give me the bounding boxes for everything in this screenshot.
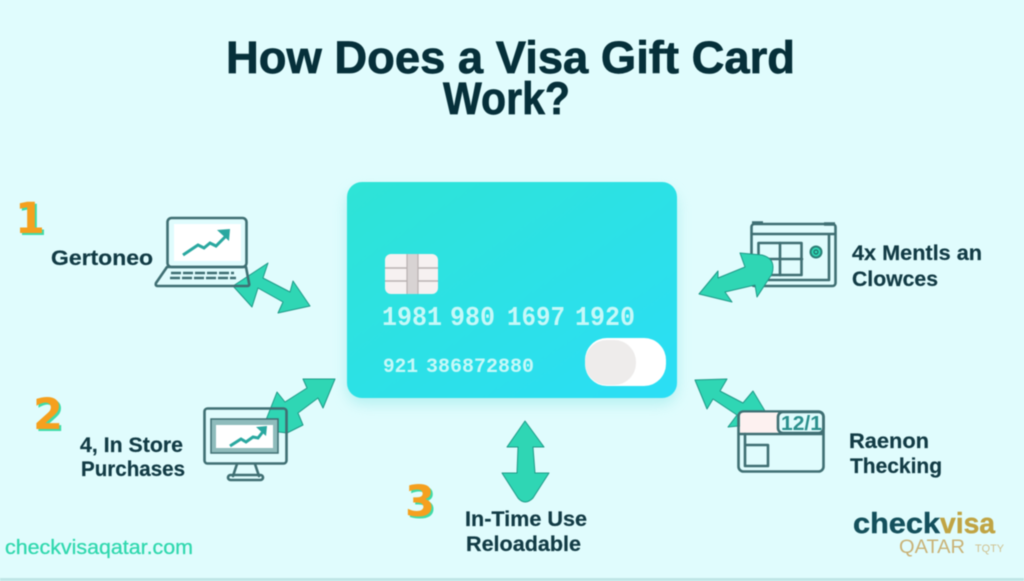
icon: date card: 12/1	[781, 413, 822, 435]
arrow: date card to card	[695, 379, 765, 427]
label: In-Time Use Reloadable: In-Time Use	[465, 508, 587, 531]
icon: laptop	[156, 218, 249, 286]
gift card	[347, 182, 677, 398]
arrow: monitor to card	[262, 379, 335, 433]
arrow: window to card	[699, 253, 773, 302]
arrow: vertical double	[502, 421, 549, 502]
arrow: laptop to card	[233, 263, 310, 313]
label: Raenon Thecking: Raenon	[849, 430, 929, 453]
icon: card toggle	[585, 338, 666, 386]
card number	[382, 304, 635, 334]
logo: checkvisa Qatar: check	[853, 508, 941, 540]
icon: date card	[738, 412, 824, 472]
label: In Store Purchases: Purchases	[81, 458, 185, 481]
card secondary number: 386872880	[426, 356, 534, 379]
card number: 1697	[507, 304, 565, 334]
logo: checkvisa Qatar: QATAR	[899, 537, 965, 558]
title: Work?	[443, 73, 570, 124]
card secondary number: 921	[383, 356, 418, 379]
label: Ments on Clowces: Clowces	[852, 268, 938, 291]
label: In-Time Use Reloadable	[465, 508, 587, 556]
label: Raenon Thecking	[849, 430, 942, 478]
label: In Store Purchases: 4, In Store	[80, 434, 183, 457]
step number 3: 3	[405, 477, 435, 527]
card number: 980	[450, 304, 495, 334]
card shadow	[347, 190, 677, 404]
label: In Store Purchases	[80, 434, 185, 481]
icon: browser window	[752, 223, 836, 286]
logo: checkvisa Qatar	[853, 508, 1005, 558]
step number 2: 2	[35, 392, 65, 442]
card number: 1981	[382, 304, 442, 334]
title	[226, 32, 795, 124]
step number 1: 1	[15, 194, 45, 244]
step number 1: 1	[17, 196, 47, 246]
label: Ments on Clowces	[852, 242, 982, 291]
icon: monitor	[204, 408, 286, 480]
logo: checkvisa Qatar: visa	[940, 508, 996, 540]
label: In-Time Use Reloadable: Reloadable	[466, 533, 581, 556]
card number: 1920	[575, 304, 635, 334]
website url: checkvisaqatar.com	[5, 537, 193, 559]
logo: checkvisa Qatar: TQTY	[975, 543, 1005, 555]
label: Ments on Clowces: 4x Mentls an	[852, 242, 982, 265]
label: Raenon Thecking: Thecking	[850, 455, 942, 478]
label: Gertoneo: Gertoneo	[51, 247, 153, 270]
step number 3: 3	[407, 479, 437, 529]
icon: card chip	[385, 254, 438, 294]
step number 2: 2	[33, 390, 63, 440]
title: How Does a Visa Gift Card	[226, 32, 795, 83]
